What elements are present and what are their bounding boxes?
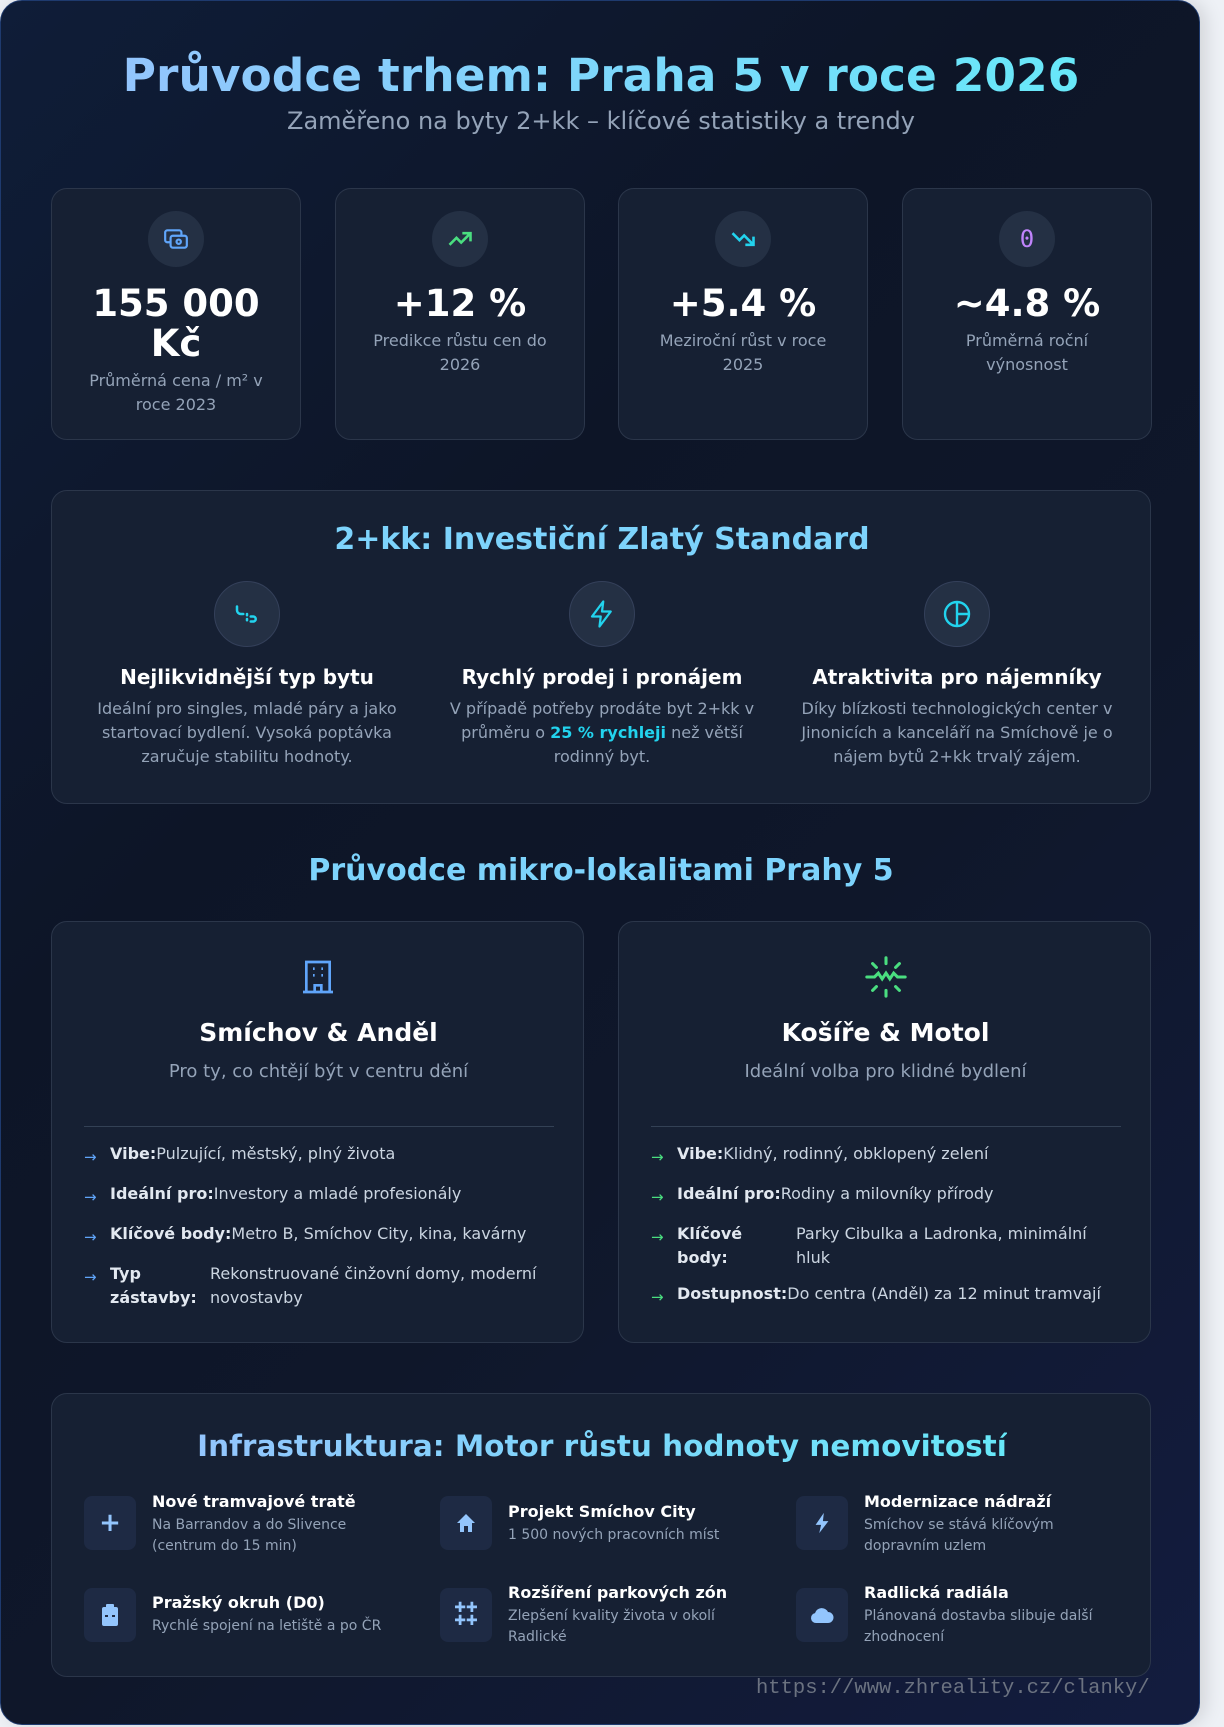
bullet list: Metro B, Smíchov City, kina, kavárny xyxy=(231,1224,526,1243)
item: radial: zhodnocení xyxy=(864,1629,944,1645)
bullet list: Ideální pro: xyxy=(110,1184,214,1203)
column: liquidity: Ideální pro singles, mladé páry a jako startovací bydlení. Vysoká poptávka zaručuje stabilitu hodnoty. xyxy=(97,699,397,766)
panel: Košíře & Motol: Ideální volba pro klidné bydlení xyxy=(744,1061,1027,1082)
item: ring road: Pražský okruh (D0) xyxy=(152,1593,325,1612)
icon: trend up xyxy=(432,211,488,267)
stat card: yoy growth: Meziroční růst v roce 2025 xyxy=(660,331,826,374)
bullet list: Vibe: xyxy=(110,1144,156,1163)
bullet list: Klíčové body: xyxy=(110,1224,231,1243)
item: station: dopravním uzlem xyxy=(864,1538,986,1554)
heading: Košíře & Motol xyxy=(782,1018,989,1047)
icon: zero: 0 xyxy=(1020,225,1034,253)
item: ring road xyxy=(84,1588,381,1642)
bullet list: → xyxy=(651,1188,664,1206)
icon: money xyxy=(148,211,204,267)
item: Smíchov City: 1 500 nových pracovních míst xyxy=(508,1527,719,1543)
icon: building xyxy=(303,960,333,994)
bullet list xyxy=(84,1144,537,1307)
icon: trend down xyxy=(715,211,771,267)
bullet list: Rodiny a milovníky přírody xyxy=(781,1184,993,1203)
item: parks: ✚✚ xyxy=(454,1600,478,1616)
bullet list: → xyxy=(651,1288,664,1306)
item: parks: ✚✚ xyxy=(454,1613,478,1629)
item: radial: Plánovaná dostavba slibuje další xyxy=(864,1608,1092,1624)
stat card: growth prediction: +12 % xyxy=(394,282,526,325)
panel: 2+kk gold standard xyxy=(51,490,1151,804)
item: ring road: Rychlé spojení na letiště a po ČR xyxy=(152,1618,381,1634)
heading: Smíchov & Anděl xyxy=(199,1018,438,1047)
bullet list: Do centra (Anděl) za 12 minut tramvají xyxy=(787,1284,1101,1303)
panel: Smíchov & Anděl: Pro ty, co chtějí být v centru dění xyxy=(169,1061,468,1082)
item: parks: Rozšíření parkových zón xyxy=(508,1583,727,1602)
stat card: price: Kč xyxy=(151,322,201,365)
bullet list: Pulzující, městský, plný života xyxy=(156,1144,395,1163)
bullet list: Dostupnost: xyxy=(677,1284,787,1303)
stat card: growth prediction: Predikce růstu cen do 2026 xyxy=(373,331,547,374)
item: parks: Zlepšení kvality života v okolí xyxy=(508,1608,715,1624)
column: fast sale xyxy=(450,581,754,766)
item: tram: + xyxy=(99,1508,121,1538)
column: tenants: Atraktivita pro nájemníky xyxy=(812,665,1102,689)
bullet list: → xyxy=(651,1228,664,1246)
bullet list: Parky Cibulka a Ladronka, minimální hluk xyxy=(796,1224,1087,1267)
bullet list: Vibe: xyxy=(677,1144,723,1163)
column: tenants xyxy=(800,581,1113,766)
bullet list: Klidný, rodinný, obklopený zelení xyxy=(723,1144,988,1163)
bullet list: → xyxy=(84,1228,97,1246)
icon: nature xyxy=(865,956,907,998)
item: station: Smíchov se stává klíčovým xyxy=(864,1517,1054,1533)
item: tram: Na Barrandov a do Slivence xyxy=(152,1517,346,1533)
item: station: Modernizace nádraží xyxy=(864,1492,1051,1511)
bullet list: Ideální pro: xyxy=(677,1184,781,1203)
stat card: yield: ~4.8 % xyxy=(954,282,1100,325)
column: fast sale: Rychlý prodej i pronájem xyxy=(462,665,742,689)
item: tram: Nové tramvajové tratě xyxy=(152,1492,356,1511)
stat card: yoy growth: +5.4 % xyxy=(670,282,816,325)
title: Průvodce trhem: Praha 5 v roce 2026 xyxy=(123,49,1079,102)
item: radial xyxy=(796,1583,1093,1645)
item: station xyxy=(796,1492,1054,1554)
bullet list xyxy=(651,1144,1102,1306)
stat card: price xyxy=(51,188,301,440)
item: tram: (centrum do 15 min) xyxy=(152,1538,297,1554)
column: liquidity xyxy=(97,581,397,766)
panel: Smíchov & Anděl xyxy=(51,921,584,1343)
item: Smíchov City xyxy=(440,1496,720,1550)
icon: zero xyxy=(999,211,1055,267)
subtitle: Zaměřeno na byty 2+kk – klíčové statistiky a trendy xyxy=(287,107,915,135)
item: parks: Radlické xyxy=(508,1629,567,1645)
column: liquidity: Nejlikvidnější typ bytu xyxy=(120,665,374,689)
item: parks xyxy=(440,1583,727,1645)
heading: Infrastruktura: Motor růstu hodnoty nemovitostí xyxy=(197,1429,1007,1463)
bullet list: → xyxy=(84,1148,97,1166)
bullet list: Rekonstruované činžovní domy, moderní novostavby xyxy=(210,1264,536,1307)
stat card: yield xyxy=(902,188,1152,440)
bullet list: → xyxy=(651,1148,664,1166)
bullet list: Investory a mladé profesionály xyxy=(214,1184,461,1203)
heading: 2+kk: Investiční Zlatý Standard xyxy=(334,522,870,557)
item: tram xyxy=(84,1492,356,1554)
section heading: micro-localities: Průvodce mikro-lokalitami Prahy 5 xyxy=(308,853,894,888)
panel: Košíře & Motol xyxy=(618,921,1151,1343)
stat card: yoy growth xyxy=(618,188,868,440)
item: Smíchov City: Projekt Smíchov City xyxy=(508,1502,696,1521)
panel: infrastructure xyxy=(51,1393,1151,1677)
stat card: growth prediction xyxy=(335,188,585,440)
column: fast sale: V případě potřeby prodáte byt 2+kk v průměru o 25 % rychleji než větší rodinný byt. xyxy=(450,699,754,766)
bullet list: → xyxy=(84,1268,97,1286)
stat card: yield: Průměrná roční výnosnost xyxy=(966,331,1088,374)
bullet list: Typ zástavby: xyxy=(110,1264,197,1307)
bullet list: → xyxy=(84,1188,97,1206)
column: tenants: Díky blízkosti technologických center v Jinonicích a kanceláří na Smíchově je o nájem bytů 2+kk trvalý zájem. xyxy=(801,699,1113,766)
source url: https://www.zhreality.cz/clanky/ xyxy=(756,1677,1150,1700)
stat card: price: 155 000 xyxy=(92,282,260,325)
bullet list: Klíčové body: xyxy=(677,1224,742,1267)
stat card: price: Průměrná cena / m² v roce 2023 xyxy=(89,371,263,414)
item: radial: Radlická radiála xyxy=(864,1583,1009,1602)
